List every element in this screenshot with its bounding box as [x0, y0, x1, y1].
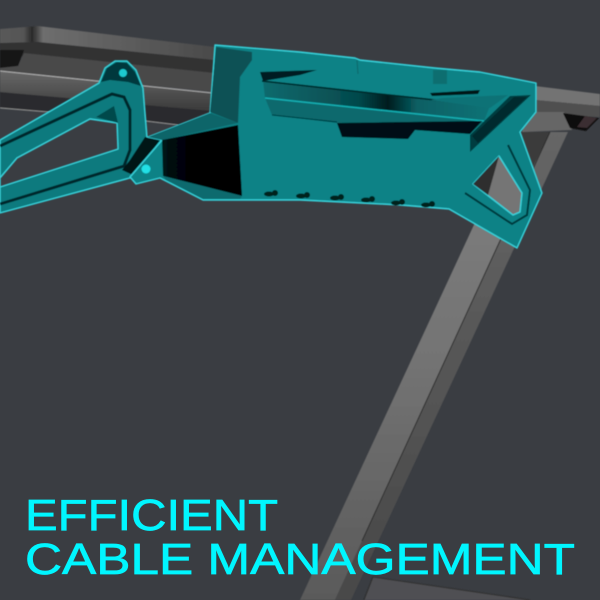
- desktop underside right: [522, 86, 600, 132]
- title: [25, 491, 575, 584]
- cable hooks: [264, 190, 435, 208]
- desktop underside left: [0, 26, 215, 125]
- right triangular bracket opening: [465, 145, 530, 224]
- title line 1: EFFICIENT: [25, 491, 278, 540]
- left support arm: [0, 61, 162, 213]
- desk leg: [300, 132, 568, 600]
- title line 2: CABLE MANAGEMENT: [25, 535, 575, 584]
- main tray body: [130, 45, 542, 248]
- screw: upper: [119, 69, 127, 77]
- screw: lower: [142, 164, 150, 174]
- cable tray highlighted in teal: [0, 45, 542, 248]
